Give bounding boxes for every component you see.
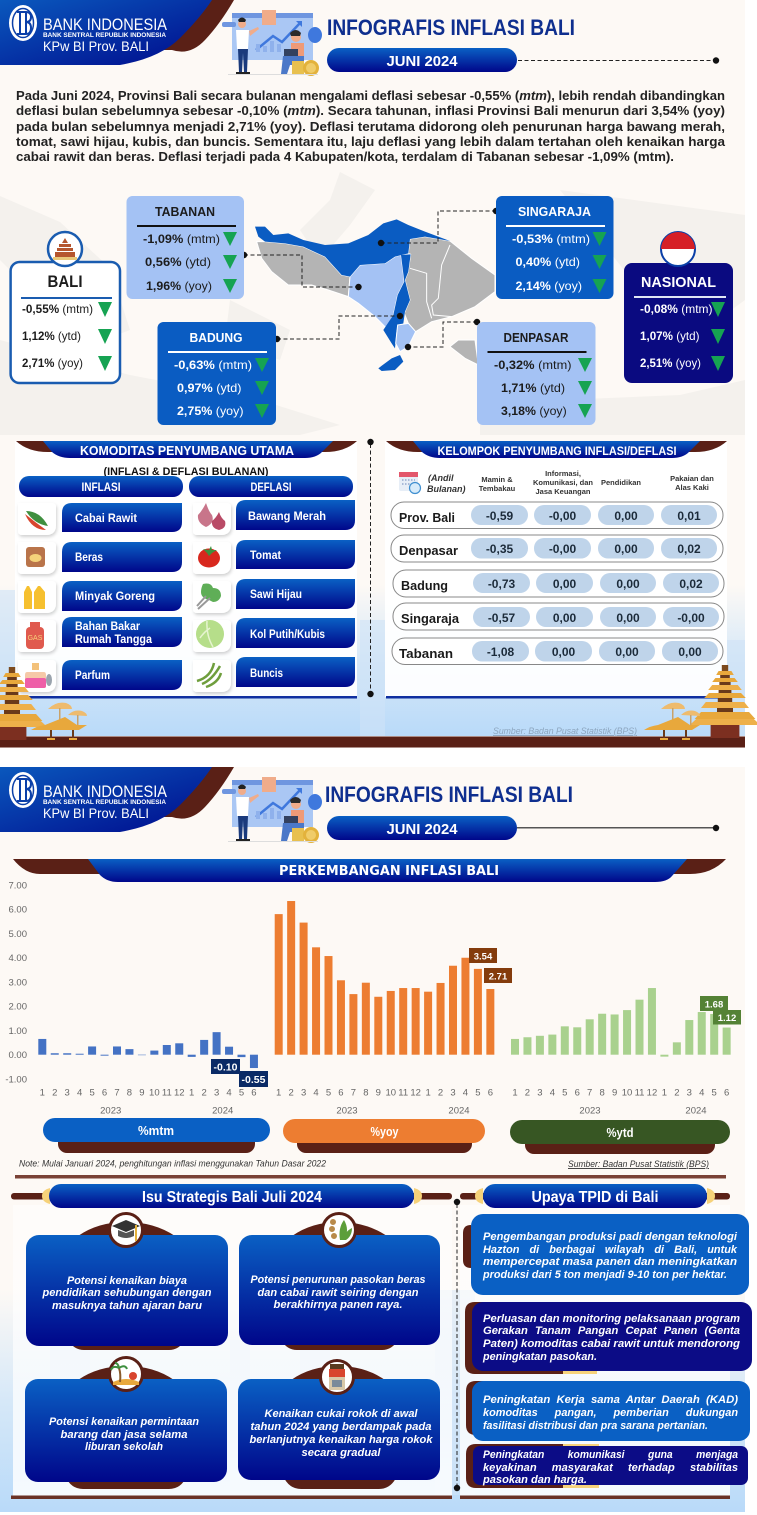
month labels: yoy: 8: [363, 1088, 368, 1098]
month labels: mtm: 5: [89, 1088, 95, 1098]
column headers: Tembakau: [479, 484, 516, 493]
panel: Tabanan: 1,96% (yoy): [146, 279, 212, 293]
month labels: yoy: 9: [376, 1088, 381, 1098]
legend pill: mtm: %mtm: [138, 1123, 174, 1138]
header band: Bank Indonesia: [0, 0, 234, 65]
row: Prov. Bali: 0,00: [614, 509, 638, 523]
Badung region: [383, 254, 411, 348]
card: Genta Paten: [465, 1302, 752, 1374]
heading: Isu Strategis: [11, 1184, 452, 1208]
card: cukai rokok: secara gradual: [302, 1447, 381, 1459]
month labels: yoy: 4: [463, 1088, 468, 1098]
icon: Indonesian flag: [661, 232, 695, 266]
data labels: ytd: 1.12: [718, 1013, 736, 1024]
year labels: 2024: [212, 1106, 233, 1116]
month labels: ytd: 4: [550, 1088, 555, 1098]
column headers: Jasa Keuangan: [535, 487, 591, 496]
panel: Nasional: -0,08% (mtm): [640, 302, 712, 316]
row: Denpasar: [391, 535, 723, 562]
month labels: ytd: 9: [612, 1088, 617, 1098]
icon: graduation cap: [110, 1214, 142, 1246]
month labels: ytd: 5: [562, 1088, 567, 1098]
card: komunikasi: Peningkatan komunikasi guna menjaga: [483, 1449, 738, 1461]
ribbon heading: chart: PERKEMBANGAN INFLASI BALI: [279, 864, 499, 879]
month labels: yoy: 1: [276, 1088, 281, 1098]
bars: ytd: [511, 988, 731, 1057]
card: Genta Paten: Gerakan Tanam Pangan Cepat Panen (Genta: [483, 1325, 740, 1337]
item: Bahan Bakar Rumah Tangga: [18, 617, 182, 652]
skyline backdrop bottom: [0, 1205, 745, 1512]
row: Badung: Badung: [401, 578, 448, 593]
row: Badung: 0,02: [679, 577, 703, 591]
month labels: yoy: 2: [289, 1088, 294, 1098]
header band page 2: BANK INDONESIA: [43, 782, 168, 801]
intro paragraph: deflasi bulan sebelumnya sebesar -0,10% ( mtm). Secara tahunan, inflasi Provinsi Bali menurun dari 3,54% (yoy): [16, 103, 725, 118]
card: pasokan beras: dan cabai rawit seiring dengan: [258, 1287, 419, 1299]
card: Hazton: Hazton di berbagai wilayah di Bali, untuk: [483, 1244, 738, 1256]
vertical divider top: [367, 439, 374, 697]
card: komunikasi: [466, 1444, 748, 1488]
row: Tabanan: -1,08: [487, 645, 514, 659]
card: biaya pendidikan: Potensi kenaikan biaya: [67, 1275, 187, 1287]
panel: Badung: 2,75% (yoy): [177, 404, 244, 418]
icon: calendar: [399, 472, 420, 494]
intro paragraph: pada bulan sebelumnya menjadi 2,71% (yoy). Deflasi terutama didorong oleh penurunan harga bawang merah,: [16, 119, 725, 134]
month labels: yoy: 1: [425, 1088, 431, 1098]
month labels: ytd: 5: [712, 1088, 717, 1098]
month labels: ytd: 1: [662, 1088, 667, 1098]
column headers: Informasi,: [545, 469, 581, 478]
panel: Nasional: 1,07% (ytd): [640, 329, 700, 343]
item: Parfum: Parfum: [75, 670, 110, 682]
row: Prov. Bali: Prov. Bali: [399, 510, 455, 525]
leader line page 2: [517, 825, 719, 831]
panel: commodities: [15, 441, 357, 698]
panel base line: [15, 696, 357, 698]
row: Tabanan: Tabanan: [399, 646, 453, 661]
legend pill: yoy: %yoy: [370, 1124, 399, 1139]
panel: Singaraja: -0,53% (mtm): [512, 232, 590, 246]
row: Prov. Bali: -0,59: [486, 509, 513, 523]
bars: mtm: [38, 1032, 258, 1068]
panel: Singaraja: [496, 196, 614, 299]
year labels: [100, 1106, 707, 1116]
card: cukai rokok: tahun 2024 yang berdampak pada: [250, 1421, 432, 1433]
row: Tabanan: 0,00: [678, 645, 702, 659]
row: Badung: 0,00: [616, 577, 640, 591]
year labels: 2024: [685, 1106, 707, 1116]
month labels: yoy: 10: [385, 1088, 396, 1098]
column headers: [479, 469, 714, 496]
skyline backdrop top: [0, 585, 745, 736]
y axis labels: 3.00: [8, 977, 27, 988]
date pill: JUNI 2024: [386, 53, 458, 70]
label: andil bulanan: Bulanan): [427, 484, 466, 494]
month labels: ytd: 3: [537, 1088, 543, 1098]
Jembrana region: [257, 242, 350, 297]
data labels: yoy: 3.54: [474, 952, 493, 962]
panel: Tabanan: -1,09% (mtm): [143, 232, 220, 246]
illustration page 2: [222, 777, 322, 843]
panel: Tabanan: TABANAN: [155, 205, 215, 219]
item: Bawang Merah: [193, 500, 355, 535]
ribbon heading: chart: [13, 859, 726, 882]
panel: Singaraja: 0,40% (ytd): [516, 255, 580, 269]
month labels: yoy: 5: [475, 1088, 481, 1098]
Denpasar region: [396, 323, 416, 352]
intro paragraph: Pada Juni 2024, Provinsi Bali secara bulanan mengalami deflasi sebesar -0,55% ( mtm), lebih rendah dibandingkan: [16, 88, 725, 103]
row: Tabanan: 0,00: [615, 645, 639, 659]
panel: Denpasar: DENPASAR: [504, 331, 568, 345]
y axis labels: 1.00: [8, 1026, 27, 1037]
row: Denpasar: -0,35: [486, 542, 513, 556]
date pill page 2: [327, 816, 517, 840]
month labels: mtm: 8: [127, 1088, 132, 1098]
data labels: ytd: [700, 996, 741, 1024]
card: Genta Paten: Paten) komoditas cabai rawit untuk mendorong: [483, 1338, 740, 1350]
source note top: Sumber: Badan Pusat Statistik (BPS): [493, 726, 637, 737]
pill: deflasi: [189, 476, 353, 497]
data labels: ytd: 1.68: [705, 1000, 723, 1010]
month labels: mtm: 12: [174, 1088, 185, 1098]
month labels: yoy: 2: [438, 1088, 443, 1098]
card: liburan sekolah: [25, 1358, 227, 1489]
pill: inflasi: INFLASI: [82, 482, 120, 494]
row: Denpasar: Denpasar: [399, 543, 458, 558]
panel: Denpasar: [477, 322, 596, 425]
header band: Bank Indonesia: BANK INDONESIA: [43, 15, 168, 34]
y axis labels: 0.00: [8, 1050, 27, 1061]
legend pill: yoy: [283, 1119, 485, 1153]
title: INFOGRAFIS INFLASI BALI: [327, 15, 575, 40]
card: KAD: komoditas pangan, pemberian dukungan: [483, 1407, 738, 1419]
month labels: ytd: 10: [622, 1088, 632, 1098]
month labels: yoy: 3: [450, 1088, 456, 1098]
panel: Badung: 0,97% (ytd): [177, 381, 242, 395]
pill: deflasi: DEFLASI: [250, 482, 292, 494]
column headers: Alas Kaki: [675, 483, 709, 492]
icon: cigarette pack: [320, 1360, 354, 1394]
label: andil bulanan: (Andil: [428, 473, 454, 483]
intro paragraph: [16, 88, 726, 164]
panel: Badung: -0,63% (mtm): [174, 358, 252, 372]
row: Prov. Bali: 0,01: [677, 509, 701, 523]
header band: Bank Indonesia: BANK SENTRAL REPUBLIK INDONESIA: [43, 33, 167, 39]
row: Denpasar: 0,02: [677, 542, 701, 556]
pagoda right: [690, 665, 757, 738]
card: liburan sekolah: liburan sekolah: [85, 1441, 163, 1453]
data labels: yoy: 2.71: [489, 972, 508, 982]
header band page 2: BANK SENTRAL REPUBLIK INDONESIA: [43, 800, 167, 806]
heading: Upaya TPID: [460, 1184, 730, 1208]
column headers: Pendidikan: [601, 478, 641, 487]
y axis labels: 4.00: [8, 953, 27, 964]
note: Note: Mulai Januari 2024, penghitungan inflasi menggunakan Tahun Dasar 2022: [19, 1158, 326, 1168]
card: komunikasi: keyakinan masyarakat terhadap stabilitas: [483, 1462, 738, 1474]
item: Cabai Rawit: [18, 503, 182, 535]
panel: Bali: 2,71% (yoy): [22, 356, 83, 370]
inner borders: [410, 245, 452, 318]
y axis labels: 5.00: [8, 929, 27, 940]
legend pill: ytd: [510, 1120, 730, 1154]
card: KAD: Peningkatan Kerja sama Antar Daerah (KAD): [483, 1394, 738, 1406]
row: Prov. Bali: -0,00: [549, 509, 576, 523]
panel: Tabanan: [126, 196, 244, 299]
month labels: mtm: 3: [65, 1088, 70, 1098]
month labels: yoy: 3: [301, 1088, 306, 1098]
month labels: mtm: 6: [102, 1088, 107, 1098]
month labels: yoy: 12: [410, 1088, 421, 1098]
Tabanan region: [348, 255, 404, 328]
panel: Bali: BALI: [48, 273, 82, 291]
y axis labels: 6.00: [8, 905, 27, 916]
page background top: [0, 0, 745, 748]
item: Beras: Beras: [75, 552, 103, 564]
panel: Denpasar: 3,18% (yoy): [501, 404, 567, 418]
item: Bahan Bakar Rumah Tangga: Rumah Tangga: [75, 634, 153, 646]
card: pasokan beras: berakhirnya panen raya.: [274, 1299, 402, 1311]
month labels: ytd: 8: [600, 1088, 605, 1098]
month labels: mtm: 7: [114, 1088, 120, 1098]
faint regional backdrop map: [0, 172, 745, 435]
row: Denpasar: -0,00: [549, 542, 576, 556]
item: Beras: [18, 542, 182, 574]
ribbon heading: commodities: [16, 441, 357, 458]
row: Singaraja: -0,00: [677, 611, 705, 625]
date pill page 2: JUNI 2024: [386, 821, 458, 838]
month labels: mtm: 11: [162, 1088, 172, 1098]
panel: Tabanan: 0,56% (ytd): [145, 255, 211, 269]
month labels: ytd: 6: [724, 1088, 729, 1098]
item: Minyak Goreng: [18, 581, 182, 613]
month labels: mtm: 3: [214, 1088, 219, 1098]
month labels: mtm: 4: [226, 1088, 232, 1098]
year labels: 2023: [336, 1106, 358, 1116]
footer band top: [0, 736, 745, 748]
item: Bahan Bakar Rumah Tangga: GAS: [28, 635, 43, 642]
month labels: yoy: 6: [338, 1088, 344, 1098]
row: Singaraja: Singaraja: [401, 611, 460, 626]
month labels: ytd: 12: [647, 1088, 657, 1098]
header band page 2: KPw BI Prov. BALI: [43, 805, 149, 821]
column headers: Komunikasi, dan: [533, 478, 593, 487]
page background bottom: [0, 767, 745, 1512]
year labels: 2023: [579, 1106, 601, 1116]
Nusa Penida: [450, 340, 478, 365]
row: Singaraja: -0,57: [488, 611, 515, 625]
subtitle: (INFLASI & DEFLASI BULANAN): [104, 466, 269, 478]
row: Singaraja: 0,00: [616, 611, 640, 625]
map of Bali: [255, 219, 495, 371]
card: Genta Paten: Perluasan dan monitoring pelaksanaan program: [483, 1313, 740, 1325]
card: KAD: fasilitasi distribusi dan pra sarana pertanian.: [483, 1420, 708, 1432]
card: cukai rokok: [238, 1360, 440, 1489]
panel: Bali: -0,55% (mtm): [22, 302, 93, 316]
item: Cabai Rawit: Cabai Rawit: [75, 513, 137, 525]
heading: Isu Strategis: Isu Strategis Bali Juli 2024: [142, 1189, 322, 1206]
card: Hazton: mempercepat masa panen dan meningkatkan: [483, 1256, 737, 1268]
card: pasokan beras: Potensi penurunan pasokan beras: [250, 1274, 426, 1286]
month labels: ytd: 3: [687, 1088, 692, 1098]
item: Parfum: [18, 660, 182, 692]
intro paragraph: cabai rawit dan beras. Deflasi terjadi pada 4 Kabupaten/kota, terdalam di Tabanan sebesar -1,09% (mtm).: [16, 149, 674, 164]
title page 2: INFOGRAFIS INFLASI BALI: [325, 782, 573, 807]
month labels: mtm: 1: [189, 1088, 194, 1098]
bars: yoy: [275, 901, 494, 1055]
item: Kol Putih/Kubis: [193, 618, 355, 652]
month labels: mtm: 10: [149, 1088, 160, 1098]
panel: Bali: [11, 232, 120, 383]
month labels: mtm: 2: [52, 1088, 57, 1098]
item: Kol Putih/Kubis: Kol Putih/Kubis: [250, 629, 325, 641]
month labels: ytd: 7: [587, 1088, 592, 1098]
item: Minyak Goreng: Minyak Goreng: [75, 591, 155, 603]
month labels: mtm: 5: [239, 1088, 244, 1098]
map connectors: [241, 208, 499, 350]
item: Bawang Merah: Bawang Merah: [248, 511, 326, 523]
month labels: mtm: 9: [139, 1088, 145, 1098]
item: Buncis: [193, 657, 355, 692]
legend pill: ytd: %ytd: [606, 1125, 634, 1140]
row: Tabanan: [392, 638, 723, 664]
card: pasokan beras: [239, 1214, 440, 1350]
month labels: mtm: 2: [202, 1088, 207, 1098]
label: andil bulanan: [427, 473, 466, 494]
pill: inflasi: [19, 476, 183, 497]
card: cukai rokok: berlanjutnya kenaikan harga rokok: [250, 1434, 433, 1446]
legend pill: mtm: [43, 1118, 270, 1153]
y axis labels: 7.00: [8, 880, 27, 892]
month labels: ytd: 2: [525, 1088, 530, 1098]
panel: contribution groups: [385, 441, 727, 698]
year labels: 2023: [100, 1106, 121, 1116]
ribbon heading: commodities: KOMODITAS PENYUMBANG UTAMA: [80, 444, 294, 458]
panel base line: [386, 696, 727, 698]
icon: beach: [110, 1358, 142, 1390]
row: Prov. Bali: [391, 502, 723, 528]
month labels: yoy: 11: [398, 1088, 408, 1098]
row: Badung: [393, 570, 724, 597]
card: cukai rokok: Kenaikan cukai rokok di awal: [264, 1408, 418, 1420]
pavilion right: [644, 703, 700, 740]
eastern regencies: [404, 237, 495, 332]
panel: Singaraja: 2,14% (yoy): [516, 279, 582, 293]
rule: [15, 1175, 726, 1178]
panel: Badung: [158, 322, 276, 425]
item: Bahan Bakar Rumah Tangga: Bahan Bakar: [75, 621, 140, 633]
card: biaya pendidikan: pendidikan sehubungan dengan: [41, 1287, 212, 1299]
card: komunikasi: pasokan dan harga.: [482, 1474, 587, 1486]
card: biaya pendidikan: masuknya tahun ajaran baru: [52, 1300, 202, 1312]
row: Singaraja: 0,00: [553, 611, 577, 625]
panel: Badung: BADUNG: [190, 331, 242, 345]
panel: Nasional: NASIONAL: [641, 274, 716, 291]
card: Hazton: Pengembangan produksi padi dengan teknologi: [483, 1231, 738, 1243]
pagoda left: [0, 667, 47, 740]
Badung south tip: [378, 355, 403, 371]
panel: Singaraja: SINGARAJA: [518, 205, 591, 219]
header band page 2: [0, 767, 234, 832]
card: liburan sekolah: Potensi kenaikan permintaan: [49, 1416, 199, 1428]
heading: Upaya TPID: Upaya TPID di Bali: [532, 1189, 658, 1206]
row: Denpasar: 0,00: [614, 542, 638, 556]
ribbon heading: groups: KELOMPOK PENYUMBANG INFLASI/DEFLASI: [438, 444, 676, 458]
item: Sawi Hijau: Sawi Hijau: [250, 589, 302, 601]
data labels: mtm: -0.55: [242, 1074, 266, 1086]
month labels: yoy: 7: [351, 1088, 356, 1098]
row: Tabanan: 0,00: [552, 645, 576, 659]
icon: Bali temple: [48, 232, 82, 266]
y axis labels: [5, 880, 27, 1085]
data labels: yoy: [469, 948, 512, 983]
card: Hazton: [463, 1214, 749, 1295]
month labels: ytd: 2: [674, 1088, 679, 1098]
month labels: yoy: 5: [326, 1088, 331, 1098]
Buleleng region: [255, 219, 450, 277]
data labels: mtm: -0.10: [214, 1062, 238, 1074]
panel: Denpasar: -0,32% (mtm): [494, 358, 572, 372]
source note: Sumber: Badan Pusat Statistik (BPS): [568, 1159, 709, 1169]
item: Tomat: Tomat: [250, 550, 281, 562]
illustration: analysts with chart: [222, 10, 322, 76]
column headers: Pakaian dan: [670, 474, 714, 483]
y axis labels: 2.00: [8, 1002, 27, 1013]
card: KAD: [466, 1381, 750, 1441]
ribbon heading: groups: [386, 441, 727, 458]
y axis labels: -1.00: [5, 1074, 27, 1085]
panel: Nasional: 2,51% (yoy): [640, 356, 701, 370]
month labels: ytd: 1: [512, 1088, 518, 1098]
card: Hazton: produksi dari 5 ton menjadi 9-10 ton per hektar.: [482, 1269, 727, 1281]
month labels: ytd: 6: [575, 1088, 580, 1098]
card: biaya pendidikan: [26, 1214, 228, 1350]
pavilion left: [31, 703, 87, 740]
month labels: mtm: 6: [251, 1088, 257, 1098]
icon: rice plant: [322, 1214, 356, 1246]
item: Buncis: Buncis: [250, 668, 283, 680]
row: Singaraja: [393, 603, 724, 630]
vertical divider bottom: [454, 1199, 460, 1491]
item: Tomat: [193, 540, 355, 574]
year labels: 2024: [448, 1106, 470, 1116]
panel: Nasional: [624, 232, 733, 383]
month labels: mtm: 4: [77, 1088, 82, 1098]
panel: Denpasar: 1,71% (ytd): [501, 381, 565, 395]
card: liburan sekolah: barang dan jasa selama: [60, 1429, 188, 1441]
column headers: Mamin &: [481, 475, 513, 484]
header band: Bank Indonesia: KPw BI Prov. BALI: [43, 38, 149, 54]
month labels: ytd: 4: [699, 1088, 704, 1098]
month labels: yoy: 4: [313, 1088, 319, 1098]
data labels: mtm: [211, 1059, 268, 1087]
item: Sawi Hijau: [193, 579, 355, 613]
dashed leader: [518, 57, 719, 64]
row: Badung: -0,73: [488, 577, 515, 591]
month labels: mtm: 1: [40, 1088, 45, 1098]
month labels: yoy: 6: [488, 1088, 493, 1098]
bottom rules: [11, 1496, 730, 1499]
date pill: [327, 48, 517, 72]
intro paragraph: tomat, sawi hijau, kubis, dan buncis. Sementara itu, laju deflasi yang lebih dalam tertahan oleh kenaikan harga: [16, 134, 726, 149]
panel: Bali: 1,12% (ytd): [22, 329, 81, 343]
month labels: ytd: 11: [635, 1088, 644, 1098]
row: Badung: 0,00: [553, 577, 577, 591]
card: Genta Paten: peningkatan pasokan.: [482, 1351, 597, 1363]
